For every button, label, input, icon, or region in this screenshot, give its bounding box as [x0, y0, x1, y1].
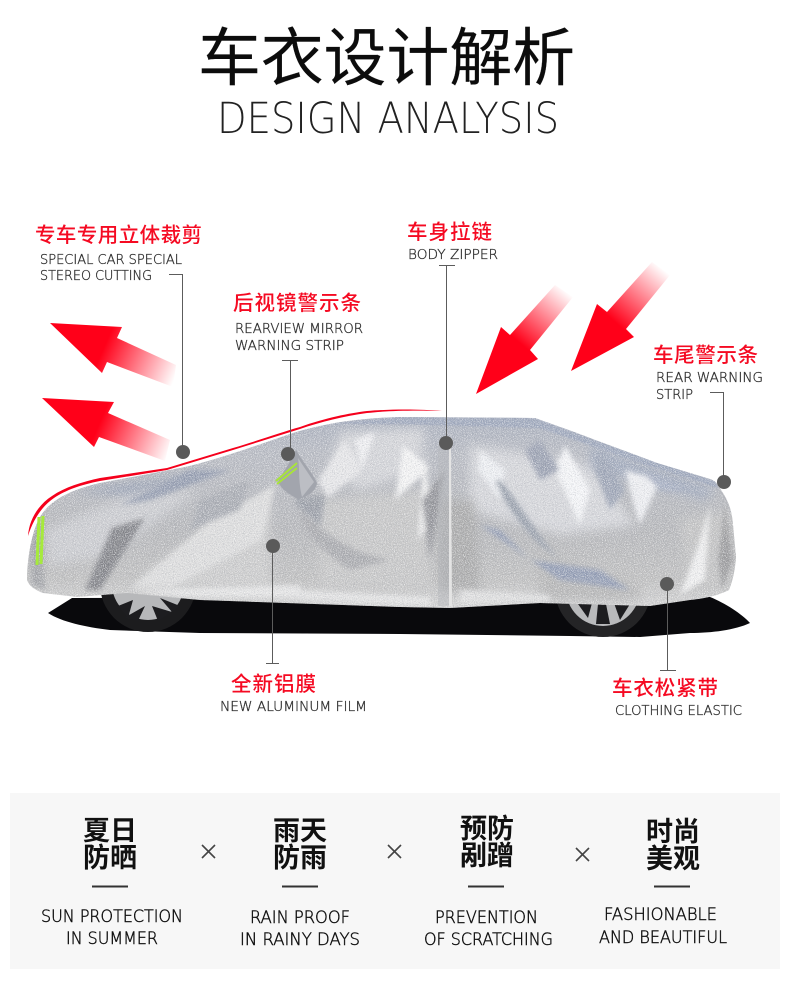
label en: REARVIEW MIRROR [235, 321, 363, 337]
feature: prevent scratching: 预防 [460, 814, 514, 844]
red roofline curve [28, 410, 442, 536]
label en [235, 321, 363, 354]
label en [40, 252, 182, 284]
feature: sun protection: SUN PROTECTION [41, 907, 183, 926]
feature: rain proof: RAIN PROOF [250, 908, 350, 927]
leader line [660, 590, 676, 670]
feature: prevent scratching: 剐蹭 [460, 841, 514, 871]
feature: rain proof: IN RAINY DAYS [240, 930, 360, 949]
feature: fashionable: 时尚 [646, 817, 700, 847]
callout: zipper [407, 221, 498, 450]
panel: features [10, 793, 780, 969]
label en: BODY ZIPPER [408, 247, 498, 263]
title [198, 24, 575, 144]
leader line [282, 360, 298, 448]
feature: fashionable: AND BEAUTIFUL [599, 928, 727, 947]
arrow: wind lower left [42, 398, 170, 461]
arrow: wind centre right [476, 285, 573, 394]
feature: rain proof [240, 816, 360, 949]
rear wheel [555, 541, 651, 637]
leader line [710, 392, 724, 476]
label en: STEREO CUTTING [40, 268, 152, 284]
icon: times 1 [202, 845, 215, 858]
leader line [169, 274, 182, 446]
label cn: 车身拉链 [407, 221, 492, 244]
car with cover [20, 410, 750, 637]
label cn: 专车专用立体裁剪 [35, 224, 202, 247]
feature: fashionable: FASHIONABLE [604, 905, 717, 924]
panel background [10, 793, 780, 969]
marker dot [717, 475, 731, 489]
label cn: 车尾警示条 [653, 344, 758, 367]
feature: prevent scratching: PREVENTION [435, 908, 538, 927]
label en: SPECIAL CAR SPECIAL [40, 252, 182, 268]
front wheel [100, 536, 196, 632]
label en: STRIP [656, 387, 693, 403]
callout: stereo cutting [35, 224, 202, 459]
feature: fashionable: 美观 [646, 844, 700, 874]
mirror warning strip [276, 463, 297, 484]
feature: prevent scratching: OF SCRATCHING [424, 930, 553, 949]
feature: fashionable [599, 817, 727, 947]
marker dot [281, 447, 295, 461]
feature: sun protection: IN SUMMER [66, 929, 158, 948]
icon: times 2 [388, 845, 401, 858]
label cn: 车衣松紧带 [612, 677, 718, 700]
callout: elastic [612, 577, 742, 719]
callout: rear strip [653, 344, 763, 489]
zipper seam [438, 445, 450, 606]
marker dot [266, 539, 280, 553]
label en: WARNING STRIP [235, 338, 344, 354]
leader line [266, 552, 279, 664]
feature: rain proof: 防雨 [273, 843, 327, 873]
chinese heading: 车衣设计解析 [198, 24, 575, 94]
feature: sun protection: 防晒 [83, 843, 137, 873]
arrow: wind upper left [50, 323, 176, 387]
callout: aluminium film [220, 539, 367, 715]
marker dot [176, 445, 190, 459]
label cn: 后视镜警示条 [233, 292, 361, 315]
front warning strip [37, 516, 43, 565]
mirror bump [278, 450, 317, 499]
cover folds and highlights [45, 428, 735, 600]
ground shadow [48, 597, 750, 637]
callout: mirror strip [233, 292, 363, 461]
marker dot [439, 436, 453, 450]
marker dot [660, 577, 674, 591]
roof edge [330, 417, 718, 488]
label en: NEW ALUMINUM FILM [220, 699, 367, 715]
feature: sun protection: 夏日 [83, 816, 137, 846]
feature: sun protection [41, 816, 183, 948]
feature: rain proof: 雨天 [273, 816, 327, 846]
label en: CLOTHING ELASTIC [615, 703, 742, 719]
aluminium sparkle texture [20, 410, 745, 615]
label en [656, 370, 763, 403]
arrow: wind far right [571, 262, 670, 371]
label cn: 全新铝膜 [231, 673, 316, 696]
icon: times 3 [576, 848, 589, 861]
label en: REAR WARNING [656, 370, 763, 386]
leader line [439, 266, 455, 437]
silver cover body [20, 410, 745, 615]
english heading: DESIGN ANALYSIS [217, 94, 559, 144]
feature: prevent scratching [424, 814, 553, 949]
